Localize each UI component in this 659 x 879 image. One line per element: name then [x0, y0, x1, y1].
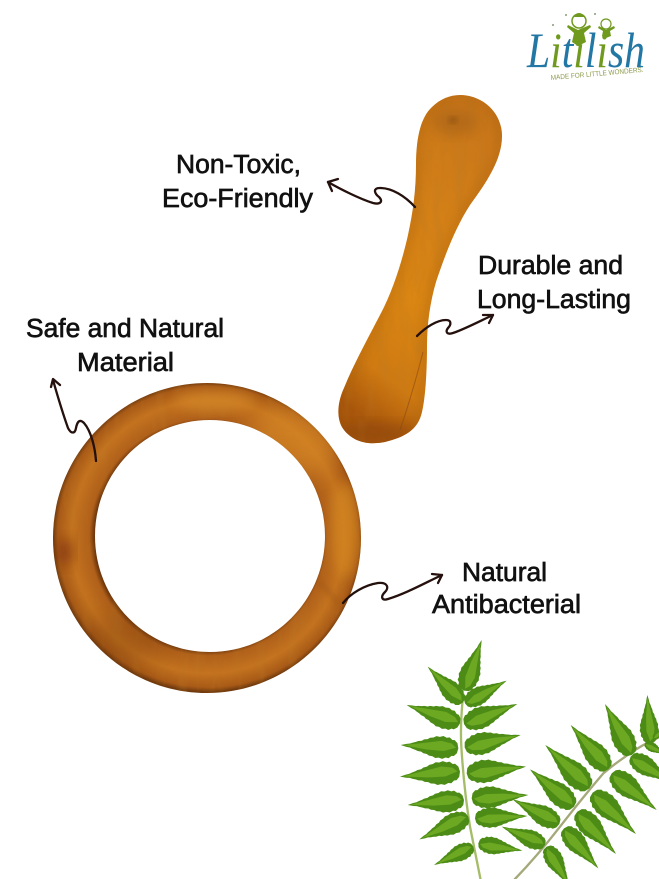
arrow: to Natural Antibacterial	[343, 574, 442, 603]
right neem branch	[498, 694, 659, 879]
logo wordmark: Litilish	[526, 22, 645, 78]
arrow: to Non-Toxic	[328, 179, 415, 207]
logo: Litilish	[526, 13, 645, 82]
label: Durable and Long-Lasting: Durable and	[478, 252, 623, 280]
label: Safe and Natural Material	[26, 315, 224, 377]
arrow: to Safe and Natural	[51, 379, 96, 461]
label: Safe and Natural Material: Safe and Natural	[26, 315, 224, 343]
rattle: wooden dumbbell	[338, 95, 502, 444]
ring: wooden teether	[50, 380, 365, 696]
icon: two baby figures	[552, 13, 615, 46]
neem branches	[399, 637, 659, 879]
arrow: to Durable	[417, 315, 493, 336]
label: Natural Antibacterial: Natural	[462, 559, 547, 587]
label: Non-Toxic, Eco-Friendly	[162, 151, 313, 213]
label: Safe and Natural Material: Material	[77, 349, 174, 377]
label: Natural Antibacterial: Antibacterial	[432, 591, 581, 619]
label: Non-Toxic, Eco-Friendly: Non-Toxic,	[176, 151, 301, 179]
logo tagline: MADE FOR LITTLE WONDERS.	[551, 67, 644, 82]
label: Non-Toxic, Eco-Friendly: Eco-Friendly	[162, 185, 313, 213]
label: Durable and Long-Lasting	[477, 252, 631, 314]
label: Natural Antibacterial	[432, 559, 581, 619]
label: Durable and Long-Lasting: Long-Lasting	[477, 286, 631, 314]
left neem branch	[399, 637, 529, 879]
